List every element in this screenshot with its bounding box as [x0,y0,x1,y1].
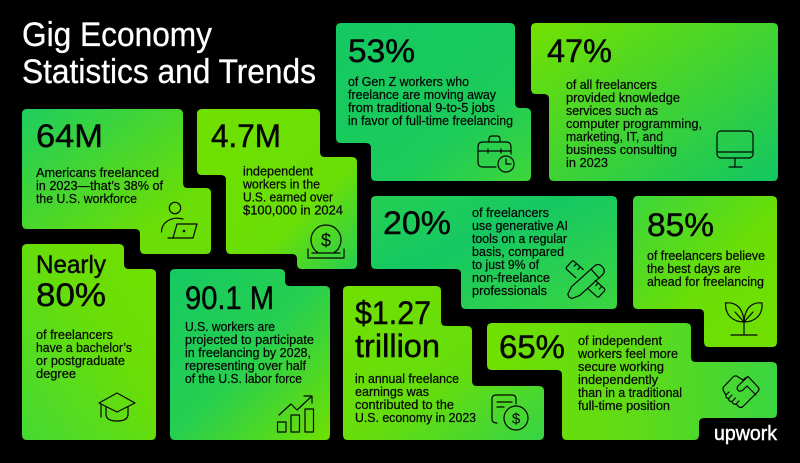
description: 80%: have a bachelor’s [36,340,132,355]
description: $1.27 trillion [355,371,476,425]
description: 90.1 M: representing over half [185,358,306,373]
panel: 90.1 M projected [170,269,330,440]
stat: 65%: 65% [499,329,565,365]
description: 80% [36,327,132,381]
description: 85% [647,248,765,289]
description: 90.1 M: in freelancing by 2028, [185,345,311,360]
description: 65%: workers feel more [577,346,678,361]
stat: $1.27 trillion [355,295,440,364]
icon: desktop monitor [717,131,753,167]
description: 80%: of freelancers [36,327,113,342]
description: 53%: in favor of full-time freelancing [348,113,513,128]
description: 53% [348,74,513,128]
description: 47%: services such as [566,103,658,118]
panel: 65% more secure [487,323,777,440]
stat: $1.27 trillion: $1.27 [355,295,431,331]
stat: 4.7M: 4.7M [211,118,281,154]
description: 20%: to just 9% of [472,257,539,272]
stat: $1.27 trillion: trillion [355,328,440,364]
description: 64M: Americans freelanced [36,165,159,180]
description: 90.1 M: projected to participate [185,332,314,347]
stat: 53%: 53% [348,33,415,69]
description: 64M [36,165,163,206]
description: 4.7M: independent [243,164,313,178]
description: $1.27 trillion: earnings was [355,384,429,399]
stat: 47%: 47% [547,33,612,69]
panel: $1.27 trillion [343,286,544,440]
panel: 64M Americans freelanced [22,109,211,254]
description: 65% [577,333,682,413]
logo: upwork: upwork [714,423,778,445]
stat: Nearly 80%: 80% [36,277,106,313]
description: 64M: in 2023—that’s 38% of [36,178,163,193]
icon: sprouting plant [725,303,762,335]
description: 20%: non-freelance [472,270,550,285]
panel: 53% Gen Z [336,23,531,181]
description: 4.7M [242,164,343,218]
description: 65%: of independent [578,333,662,348]
icon: handshake [723,376,759,408]
description: 47%: business consulting [566,142,677,157]
description: 47% [566,77,702,170]
icon: graduation cap [99,393,135,421]
description: 20%: use generative AI [472,218,568,233]
icon: person at laptop [162,202,197,238]
description: 90.1 M: U.S. workers are [185,319,275,334]
panel: 20% generative AI [371,196,617,309]
description: 80%: degree [36,366,76,381]
panel: 47% knowledge services [531,23,778,181]
icon: dollar coin on tray [308,225,344,258]
panel: 85% optimistic [633,196,777,347]
description: 85%: the best days are [647,261,741,276]
stat: 90.1 M: 90.1 M [185,280,274,316]
description: 47%: of all freelancers [566,77,657,92]
description: 20%: basis, compared [472,244,564,259]
title [22,16,316,91]
description: 4.7M: $100,000 in 2024 [243,202,343,218]
description: 53%: of Gen Z workers who [348,74,469,89]
description: 85%: ahead for freelancing [647,274,764,289]
description: 20%: professionals [472,283,547,298]
icon: dollar coin on tray: $ [321,230,331,250]
stat: Nearly 80% [36,251,106,313]
description: 20% [472,205,568,298]
title: Gig Economy [22,16,212,54]
description: 20%: tools on a regular [472,231,568,246]
icon: briefcase and clock [478,136,514,172]
description: 53%: freelance are moving away [348,87,496,102]
description: 64M: the U.S. workforce [36,191,137,206]
description: 65%: independently [578,372,658,387]
icon: document with dollar coin: $ [512,410,521,428]
description: 65%: than in a traditional [578,385,682,400]
description: 85%: of freelancers believe [647,248,765,263]
icon: pencil and ruler [565,260,606,301]
stat: Nearly 80%: Nearly [36,251,106,279]
panel: nearly 80% degree [22,244,156,440]
icon: document with dollar coin [492,395,528,430]
description: 65%: secure working [578,359,664,374]
icon: rising bar chart [278,396,314,432]
panel: 4.7M high earners [197,109,357,269]
description: 53%: from traditional 9-to-5 jobs [348,100,495,115]
stat: 85%: 85% [647,207,714,243]
description: 90.1 M [185,319,314,386]
stat: 64M: 64M [36,118,103,154]
description: 20%: of freelancers [472,205,549,220]
description: 65%: full-time position [578,398,670,413]
description: $1.27 trillion: U.S. economy in 2023 [355,410,476,425]
description: 47%: computer programming, [566,116,702,131]
description: 4.7M: U.S. earned over [243,190,334,204]
description: $1.27 trillion: contributed to the [355,397,454,412]
description: $1.27 trillion: in annual freelance [355,371,459,386]
description: 80%: or postgraduate [36,353,125,368]
description: 90.1 M: of the U.S. labor force [185,371,302,386]
description: 47%: in 2023 [566,155,608,170]
description: 4.7M: workers in the [242,176,320,192]
stat: 20%: 20% [383,205,451,241]
title: Statistics and Trends [22,53,316,91]
description: 47%: provided knowledge [566,90,680,105]
description: 47%: marketing, IT, and [566,129,663,144]
